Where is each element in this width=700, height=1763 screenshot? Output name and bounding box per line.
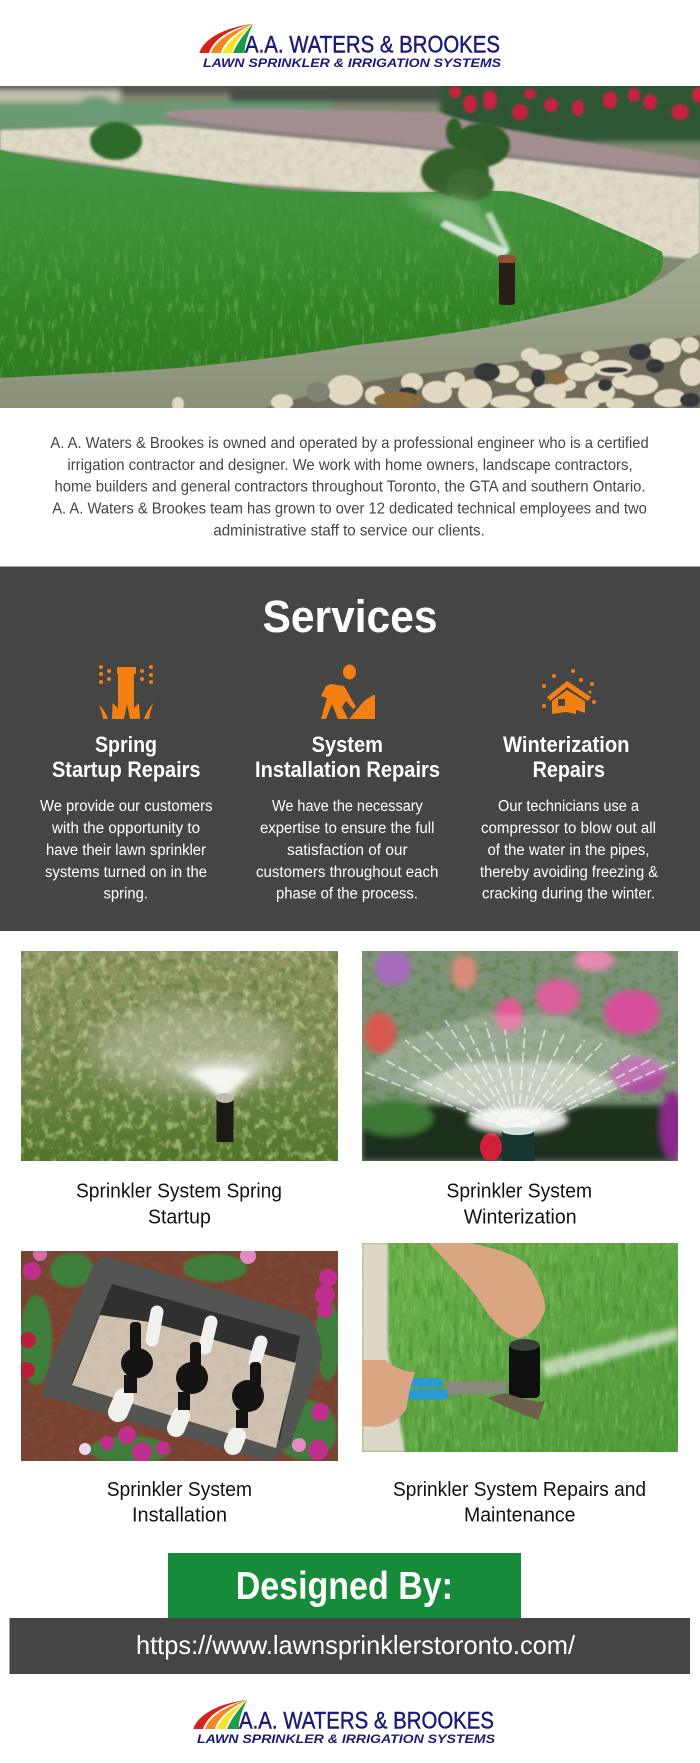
service description: cracking during the winter. [482, 886, 655, 903]
sprinkler head [498, 255, 516, 305]
valves [121, 1322, 264, 1428]
caption: spring startup [76, 1181, 282, 1228]
service description: We have the necessary [272, 798, 423, 815]
sprinkler [216, 1093, 234, 1142]
caption: repairs and maintenance: Maintenance [464, 1504, 576, 1526]
caption: winterization [446, 1181, 592, 1228]
service title: Winterization [503, 732, 630, 757]
logo wordmark: A.A. WATERS & BROOKES [245, 32, 500, 59]
intro paragraph: administrative staff to service our clients. [213, 522, 485, 539]
caption: winterization: Winterization [464, 1206, 577, 1228]
service description: Our technicians use a [498, 798, 639, 815]
caption: winterization: Sprinkler System [446, 1181, 592, 1203]
logo tagline: LAWN SPRINKLER & IRRIGATION SYSTEMS [203, 56, 501, 70]
lower hand [362, 1360, 415, 1427]
flowers [449, 86, 700, 120]
logo: footer [193, 1700, 495, 1746]
service description: with the opportunity to [51, 820, 200, 837]
panel: services [0, 566, 700, 931]
sprinkler [502, 1127, 534, 1163]
service column: system installation repairs [255, 664, 440, 903]
intro paragraph: home builders and general contractors throughout Toronto, the GTA and southern Ontario. [54, 479, 646, 496]
photo: valve box [19, 1247, 341, 1464]
flowers [19, 1247, 337, 1462]
service title: System [312, 732, 383, 757]
photo: sprinkler repair [362, 1243, 678, 1452]
logo: top header [199, 24, 501, 70]
service description: customers throughout each [256, 864, 438, 881]
service description [256, 798, 438, 903]
intro paragraph: A. A. Waters & Brookes team has grown to over 12 dedicated technical employees and two [52, 501, 647, 518]
logo tagline: LAWN SPRINKLER & IRRIGATION SYSTEMS [197, 1732, 495, 1746]
service description: expertise to ensure the full [260, 820, 434, 837]
white pebble bed [0, 120, 700, 260]
spray haze [95, 1008, 295, 1092]
banner: designed by [168, 1553, 521, 1618]
service description: phase of the process. [276, 886, 418, 903]
paved path [165, 109, 700, 178]
concrete edge [362, 1243, 405, 1452]
sprinkler [509, 1339, 540, 1398]
service description [480, 798, 659, 903]
bushes [90, 118, 510, 201]
service description: We provide our customers [40, 798, 213, 815]
icon: worker with shovel [321, 664, 375, 719]
service title line 2: Repairs [533, 757, 605, 782]
banner text: Designed By: [236, 1565, 453, 1608]
caption: spring startup: Startup [148, 1206, 211, 1228]
curb [0, 252, 700, 410]
caption: installation [107, 1479, 252, 1526]
lawn [0, 150, 663, 378]
service description: of the water in the pipes, [488, 842, 650, 859]
water spray [400, 196, 512, 259]
service description: systems turned on in the [45, 864, 207, 881]
service description: thereby avoiding freezing & [480, 864, 659, 881]
service column: spring startup repairs [40, 665, 213, 903]
spray [540, 1327, 678, 1378]
caption: spring startup: Sprinkler System Spring [76, 1181, 282, 1203]
valve box [42, 1257, 322, 1462]
spray fan [168, 1057, 275, 1100]
intro paragraph: irrigation contractor and designer. We work with home owners, landscape contractors, [67, 457, 633, 474]
heading: Services: Services [262, 591, 438, 642]
caption: installation: Installation [132, 1504, 227, 1526]
service title: Spring [95, 732, 157, 757]
red bloom [480, 1133, 502, 1161]
website url: https://www.lawnsprinklerstoronto.com/ [136, 1630, 576, 1660]
photo: spray over flowers [357, 949, 684, 1163]
caption: installation: Sprinkler System [107, 1479, 252, 1501]
hero photo: lawn sprinkler [0, 80, 700, 411]
intro paragraph: A. A. Waters & Brookes is owned and operated by a professional engineer who is a certified [50, 435, 649, 452]
background garden [0, 80, 700, 142]
spray fan [362, 1015, 678, 1135]
background blooms [357, 949, 684, 1161]
service column: winterization repairs [480, 669, 659, 903]
logo wordmark: A.A. WATERS & BROOKES [239, 1708, 494, 1735]
service description: have their lawn sprinkler [46, 842, 206, 859]
photo: sprinkler on lawn [21, 951, 338, 1161]
foliage [20, 1253, 341, 1464]
pipes [118, 1312, 261, 1446]
icon: house with snow [542, 669, 596, 714]
gravel [70, 1310, 300, 1450]
service description: satisfaction of our [287, 842, 408, 859]
service description: compressor to blow out all [481, 820, 656, 837]
service description: spring. [104, 886, 148, 903]
service title line 2: Installation Repairs [255, 757, 440, 782]
service title line 2: Startup Repairs [52, 757, 200, 782]
upper hand [429, 1243, 545, 1338]
banner: website [10, 1618, 690, 1674]
caption: repairs and maintenance [393, 1479, 646, 1526]
intro paragraph [50, 435, 649, 539]
icon: pop-up sprinkler [99, 665, 154, 719]
caption: repairs and maintenance: Sprinkler System Repairs and [393, 1479, 646, 1501]
icon: rainbow arc [193, 1700, 247, 1729]
pliers [397, 1378, 545, 1420]
foreground pebbles [172, 335, 700, 411]
service description [40, 798, 213, 903]
icon: rainbow arc [199, 24, 253, 53]
